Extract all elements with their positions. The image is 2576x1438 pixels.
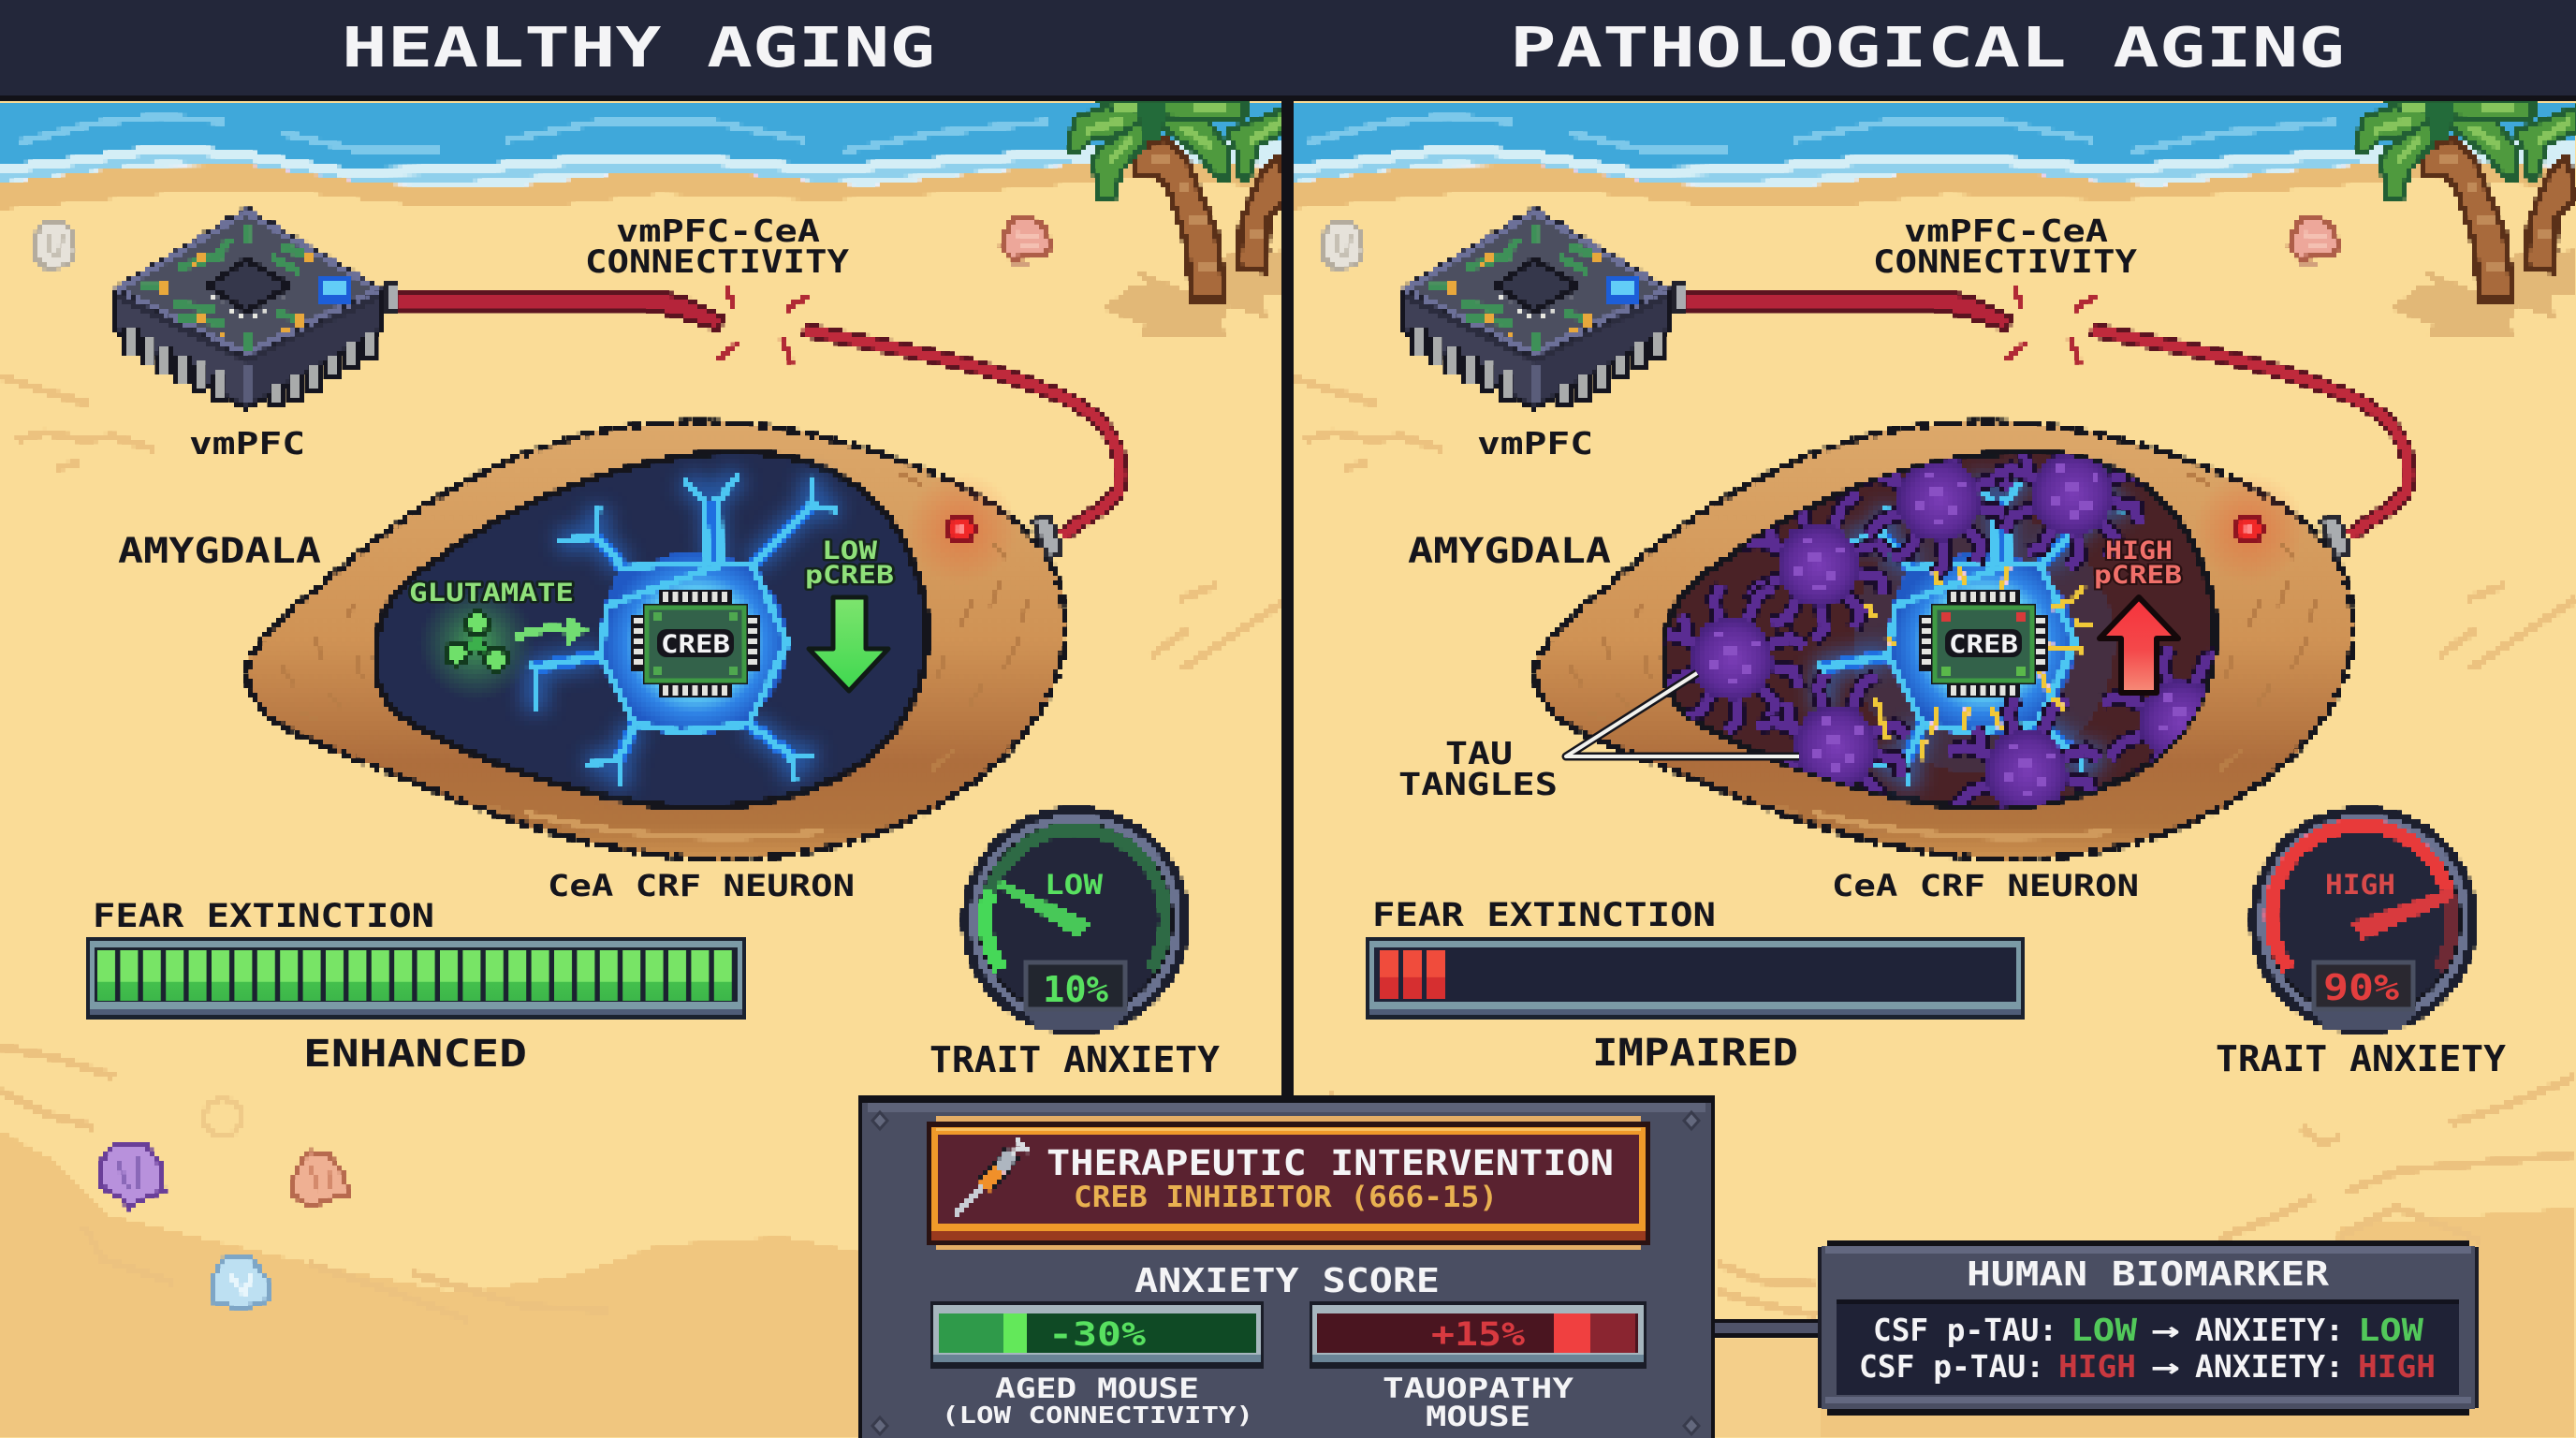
label: low connectivity: (LOW CONNECTIVITY)	[942, 1401, 1253, 1429]
label: aged mouse: AGED MOUSE	[995, 1372, 1199, 1404]
connector between panels	[1715, 1319, 1821, 1338]
label: fear extinction: FEAR EXTINCTION	[93, 898, 434, 935]
arrow: up	[2100, 597, 2178, 693]
icon: vmPFC chip	[1402, 208, 1686, 409]
row: low: ANXIETY:	[2195, 1312, 2344, 1348]
bar: fear extinction enhanced	[86, 937, 746, 1020]
title bar	[0, 0, 2576, 101]
label: connectivity second line: CONNECTIVITY	[585, 243, 850, 281]
heading: healthy aging: HEALTHY AGING	[342, 15, 935, 80]
panel: therapeutic intervention	[858, 1095, 1715, 1438]
amygdala cavity with neuron	[375, 452, 927, 808]
tau tangle	[1756, 669, 1911, 796]
label: low: LOW	[1045, 869, 1104, 901]
bar: tauopathy mouse	[1310, 1301, 1647, 1369]
row: low: LOW	[2358, 1312, 2423, 1348]
CREB chip: CREB	[1949, 630, 2018, 659]
label: trait anxiety: TRAIT ANXIETY	[2216, 1038, 2506, 1079]
label: amygdala: AMYGDALA	[1408, 531, 1611, 571]
glutamate icon and arrow	[418, 585, 588, 701]
label: high: HIGH	[2105, 536, 2173, 565]
heading: HUMAN BIOMARKER	[1967, 1255, 2329, 1294]
label: connectivity second line: CONNECTIVITY	[1873, 243, 2138, 281]
amygdala shell	[1535, 422, 2353, 859]
panel: pathological aging	[1288, 15, 2576, 1079]
bottom-left shells	[99, 1144, 348, 1309]
arrow: down	[809, 597, 888, 691]
row: high: →	[2151, 1348, 2180, 1385]
value: 10%: 10%	[1043, 969, 1108, 1010]
amygdala cavity with neuron and tau tangles	[1659, 449, 2219, 810]
label: vmPFC: vmPFC	[1477, 425, 1593, 462]
label: trait anxiety: TRAIT ANXIETY	[929, 1039, 1220, 1080]
value: +15%: +15%	[1431, 1316, 1525, 1354]
row: high: ANXIETY:	[2195, 1348, 2344, 1385]
row: high: HIGH	[2058, 1348, 2136, 1385]
heading: anxiety score: ANXIETY SCORE	[1134, 1262, 1440, 1300]
label: impaired: IMPAIRED	[1592, 1032, 1798, 1075]
row: high: HIGH	[2358, 1348, 2436, 1385]
panel: healthy aging	[0, 15, 1288, 1080]
text: title: THERAPEUTIC INTERVENTION	[1046, 1143, 1614, 1183]
label: tauopathy: TAUOPATHY	[1383, 1372, 1574, 1404]
banner: intervention	[927, 1116, 1650, 1250]
tau tangle	[1995, 454, 2145, 571]
gauge: trait anxiety low	[961, 806, 1190, 1034]
heading: pathological aging: PATHOLOGICAL AGING	[1510, 15, 2345, 80]
beach scene with water, palms and shells	[0, 101, 1288, 669]
value: -30%: -30%	[1048, 1316, 1146, 1354]
label: vmPFC: vmPFC	[189, 425, 305, 462]
gauge: trait anxiety high	[2249, 806, 2478, 1034]
bar: fear extinction impaired	[1366, 937, 2025, 1020]
tau tangle	[1740, 492, 1890, 639]
label: fear extinction: FEAR EXTINCTION	[1372, 897, 1716, 934]
label: tangles: TANGLES	[1398, 766, 1558, 802]
tau tangle	[1948, 693, 2102, 809]
row: low	[1873, 1312, 2423, 1348]
row: high: CSF p-TAU:	[1859, 1348, 2044, 1385]
row: low: →	[2151, 1312, 2180, 1348]
callout lines: tau tangles	[1566, 673, 1799, 756]
icon: syringe	[955, 1138, 1032, 1215]
label: mouse: MOUSE	[1426, 1401, 1530, 1432]
row: low: CSF p-TAU:	[1873, 1312, 2057, 1348]
label: neuron: CeA CRF NEURON	[1832, 868, 2139, 903]
label: amygdala: AMYGDALA	[118, 531, 321, 571]
bar: aged mouse	[930, 1301, 1264, 1369]
CREB chip: CREB	[661, 630, 730, 659]
value: 90%: 90%	[2323, 967, 2399, 1008]
wire: vmPFC-CeA broken connection	[398, 286, 1120, 536]
row: low: LOW	[2071, 1312, 2137, 1348]
label: pCREB: pCREB	[2094, 561, 2182, 590]
label: neuron: CeA CRF NEURON	[548, 868, 855, 903]
label: glutamate: GLUTAMATE	[409, 579, 574, 608]
panel: human biomarker	[1818, 1240, 2479, 1416]
label: connectivity: vmPFC-CeA	[1904, 213, 2108, 249]
CREB chip	[1919, 590, 2048, 697]
label: enhanced: ENHANCED	[303, 1033, 527, 1076]
label: pCREB: pCREB	[805, 561, 894, 590]
row: high	[1859, 1348, 2436, 1385]
tau tangle	[1863, 459, 2013, 580]
amygdala shell	[247, 422, 1065, 859]
panel divider	[1281, 95, 1294, 1097]
label: connectivity: vmPFC-CeA	[616, 213, 820, 249]
beach scene with water, palms and shells	[1288, 101, 2576, 669]
label: high: HIGH	[2325, 869, 2395, 901]
CREB chip	[631, 590, 760, 697]
rivets	[872, 1112, 1699, 1434]
wire: vmPFC-CeA broken connection	[1686, 286, 2408, 536]
tau tangle	[2102, 646, 2215, 772]
icon: vmPFC chip	[114, 208, 398, 409]
tau tangle	[1654, 585, 1804, 733]
readout	[1837, 1299, 2459, 1395]
label: low: LOW	[822, 536, 878, 565]
label: tau: TAU	[1445, 735, 1513, 771]
text: drug name: CREB INHIBITOR (666-15)	[1074, 1181, 1498, 1214]
